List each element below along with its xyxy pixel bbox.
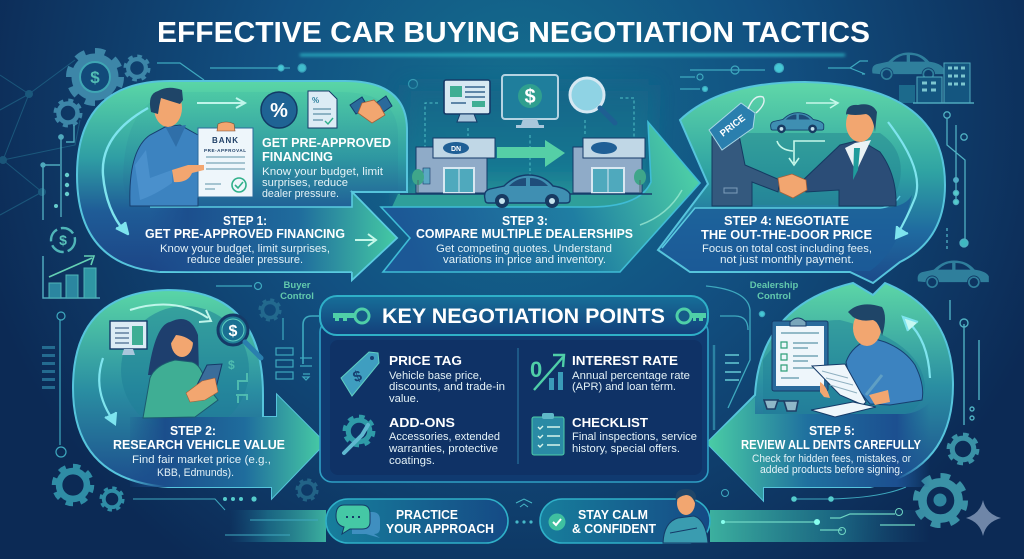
gears, lower right <box>917 435 977 524</box>
curved arrow <box>903 317 930 378</box>
circuit decoration: lower band left <box>133 496 326 542</box>
item: checklist: CHECKLIST <box>572 415 648 430</box>
icon: document: % <box>312 96 319 105</box>
item: add-ons <box>344 415 500 467</box>
circuit decoration: right of center <box>706 286 765 430</box>
person with document <box>130 88 253 206</box>
inner dark area <box>330 340 702 475</box>
arrow banner <box>150 192 397 280</box>
text block: dealer pressure. <box>262 188 339 200</box>
label: buyer control: Buyer <box>284 280 311 291</box>
item: add-ons: coatings. <box>389 455 435 467</box>
text block <box>701 213 872 266</box>
dealership left <box>412 138 495 193</box>
icon: key left <box>333 309 369 323</box>
arrow: right <box>806 99 838 108</box>
header pill <box>320 296 708 335</box>
icon: magnifier with dollar <box>218 315 261 358</box>
document: BANK <box>212 136 238 145</box>
item: price tag: Vehicle base price, <box>389 370 482 382</box>
panel: key negotiation points <box>320 296 708 482</box>
computer: dollar screen <box>502 75 558 128</box>
icon: percent: % <box>270 100 288 122</box>
icon: magnifying glass <box>570 78 615 123</box>
item: interest rate <box>530 353 690 393</box>
panel: step 5 review documents <box>707 283 953 500</box>
item: interest rate: Annual percentage rate <box>572 370 690 382</box>
chart icon: rising bars <box>43 256 100 298</box>
label: dealership control: Dealership <box>750 280 798 291</box>
text block <box>113 424 285 479</box>
handshake <box>778 174 807 198</box>
right businessman <box>800 104 896 206</box>
pill text: YOUR APPROACH <box>386 522 494 536</box>
text block: GET PRE-APPROVED <box>262 135 391 150</box>
step heading: reduce dealer pressure. <box>187 254 303 266</box>
pill text <box>572 508 656 536</box>
arrow: down <box>777 141 825 165</box>
dealership left: DN <box>451 146 461 153</box>
text block: REVIEW ALL DENTS CAREFULLY <box>741 438 922 452</box>
document: PRE-APPROVAL <box>204 148 246 153</box>
lobe <box>658 82 945 283</box>
curved arrow <box>888 122 917 238</box>
panel frame <box>320 320 708 482</box>
text block: FINANCING <box>262 149 333 164</box>
person with phone <box>143 319 222 418</box>
text block: KBB, Edmunds). <box>157 467 234 479</box>
title underline <box>300 54 845 56</box>
pill text <box>386 508 494 536</box>
circuit decoration: top left <box>0 60 80 215</box>
pill: practice your approach <box>326 499 508 543</box>
step heading: GET PRE-APPROVED FINANCING <box>145 227 345 241</box>
text block: Focus on total cost including fees, <box>702 243 872 255</box>
item: interest rate: 0 <box>530 357 542 382</box>
icon: check <box>548 514 566 530</box>
price tag <box>709 96 764 150</box>
text block: STEP 4: NEGOTIATE <box>724 213 849 228</box>
circuit decoration: center left <box>56 282 320 457</box>
step heading: STEP 1: <box>223 214 267 228</box>
pill text: & CONFIDENT <box>572 522 656 536</box>
price tag: PRICE <box>718 113 748 139</box>
inner scene <box>763 320 925 415</box>
ring lobe <box>73 290 325 498</box>
person: arms crossed <box>663 489 708 543</box>
scene backdrop <box>400 85 655 205</box>
text block: STEP 5: <box>809 424 855 438</box>
car <box>771 113 824 133</box>
icon: dollar ring <box>51 228 75 252</box>
car <box>485 175 570 208</box>
inner circle <box>121 306 249 434</box>
arrow banner <box>707 395 935 500</box>
car outline, lower right <box>918 260 989 287</box>
icon: key right <box>677 309 706 323</box>
heading and text: COMPARE MULTIPLE DEALERSHIPS <box>416 227 633 241</box>
item: interest rate: (APR) and loan term. <box>572 381 676 393</box>
icon: computer <box>110 321 147 355</box>
circuit decoration: right <box>944 112 968 250</box>
dots between pills <box>515 499 533 524</box>
inner scene <box>712 133 901 205</box>
item: checklist: history, special offers. <box>572 443 680 455</box>
big arrow banner <box>381 122 700 272</box>
panel: step 4 negotiate <box>658 82 945 283</box>
lower band right <box>710 487 930 542</box>
icon: magnifier with dollar: $ <box>229 323 238 340</box>
title: EFFECTIVE CAR BUYING NEGOTIATION TACTICS <box>157 17 870 49</box>
curved arrow <box>103 108 148 234</box>
lobe <box>707 283 953 500</box>
text block: not just monthly payment. <box>720 254 854 266</box>
label: buyer control: Control <box>280 291 314 302</box>
text block <box>741 424 922 476</box>
arrow banner <box>130 395 325 498</box>
heading and text: STEP 3: <box>502 214 548 228</box>
glasses <box>764 400 798 411</box>
heading and text: Get competing quotes. Understand <box>436 243 612 255</box>
skyline: car and buildings, top right <box>872 52 974 103</box>
item: price tag: discounts, and trade-in <box>389 381 505 393</box>
text block: Find fair market price (e.g., <box>132 454 271 466</box>
step heading: Know your budget, limit surprises, <box>160 243 330 255</box>
heading: KEY NEGOTIATION POINTS <box>382 304 665 328</box>
lobe with arrow outline <box>77 81 407 280</box>
icon: chat bubbles <box>336 505 380 538</box>
small glyphs <box>228 358 248 403</box>
text block: Check for hidden fees, mistakes, or <box>752 453 911 465</box>
loose paper <box>811 402 876 417</box>
item: add-ons: Accessories, extended <box>389 431 500 443</box>
document <box>198 128 253 197</box>
text block <box>262 135 391 200</box>
item: checklist <box>532 413 697 455</box>
arrow: small right <box>355 234 376 246</box>
circuit decoration: far right <box>950 300 979 425</box>
gears, lower left <box>55 467 123 510</box>
item: add-ons: ADD-ONS <box>389 415 455 430</box>
text plate <box>662 195 912 271</box>
gear with dollar sign, top left <box>70 52 120 102</box>
item: interest rate: INTEREST RATE <box>572 353 678 368</box>
item: price tag <box>341 352 505 405</box>
curved arrow <box>99 358 116 424</box>
small glyphs: $ <box>228 358 235 372</box>
transfer arrow <box>497 140 565 167</box>
ground band <box>392 194 655 207</box>
icon: document <box>308 91 337 128</box>
inner lobe <box>123 92 398 207</box>
label: dealership control <box>750 280 798 302</box>
text block: RESEARCH VEHICLE VALUE <box>113 438 285 452</box>
text block: added products before signing. <box>760 464 903 476</box>
panel: step 2 research vehicle value <box>73 290 325 498</box>
circuit lines left <box>41 125 74 220</box>
person reading <box>812 304 923 405</box>
icon: dollar ring: $ <box>59 232 67 248</box>
step heading <box>145 214 345 266</box>
item: checklist: Final inspections, service <box>572 431 697 443</box>
item: price tag: $ <box>351 367 365 386</box>
item: price tag: value. <box>389 393 419 405</box>
dealership right <box>573 138 646 193</box>
divider <box>517 348 519 464</box>
label: dealership control: Control <box>757 291 791 302</box>
text block: surprises, reduce <box>262 177 348 189</box>
text block: Know your budget, limit <box>262 166 383 178</box>
pill: stay calm and confident <box>540 489 710 543</box>
text block: THE OUT-THE-DOOR PRICE <box>701 227 872 242</box>
heading and text <box>416 214 633 266</box>
item: add-ons: warranties, protective <box>388 443 498 455</box>
heading and text: variations in price and inventory. <box>443 254 606 266</box>
dotted connectors <box>425 98 634 180</box>
road <box>400 193 652 195</box>
panel: step 1 pre-approved financing <box>77 81 407 280</box>
label: buyer control <box>280 280 314 302</box>
panel: step 3 compare dealerships <box>381 75 700 272</box>
gear with dollar sign, top left: $ <box>90 68 100 87</box>
curved highlight on arrow <box>640 190 682 225</box>
sparkle star <box>966 500 1001 536</box>
circuit decoration: top <box>157 61 868 92</box>
small gears, top left <box>56 56 149 126</box>
clipboard <box>772 318 828 391</box>
computer: listing <box>444 80 490 122</box>
pill text: PRACTICE <box>396 508 458 522</box>
icon: percent <box>261 92 297 128</box>
computer: dollar screen: $ <box>524 86 536 108</box>
left businessman <box>712 130 780 206</box>
icon: handshake <box>350 96 392 123</box>
pill text: STAY CALM <box>578 508 648 522</box>
text block: STEP 2: <box>170 424 216 438</box>
bars, far left <box>42 346 55 389</box>
item: price tag: PRICE TAG <box>389 353 462 368</box>
arrow: direction <box>197 98 245 108</box>
